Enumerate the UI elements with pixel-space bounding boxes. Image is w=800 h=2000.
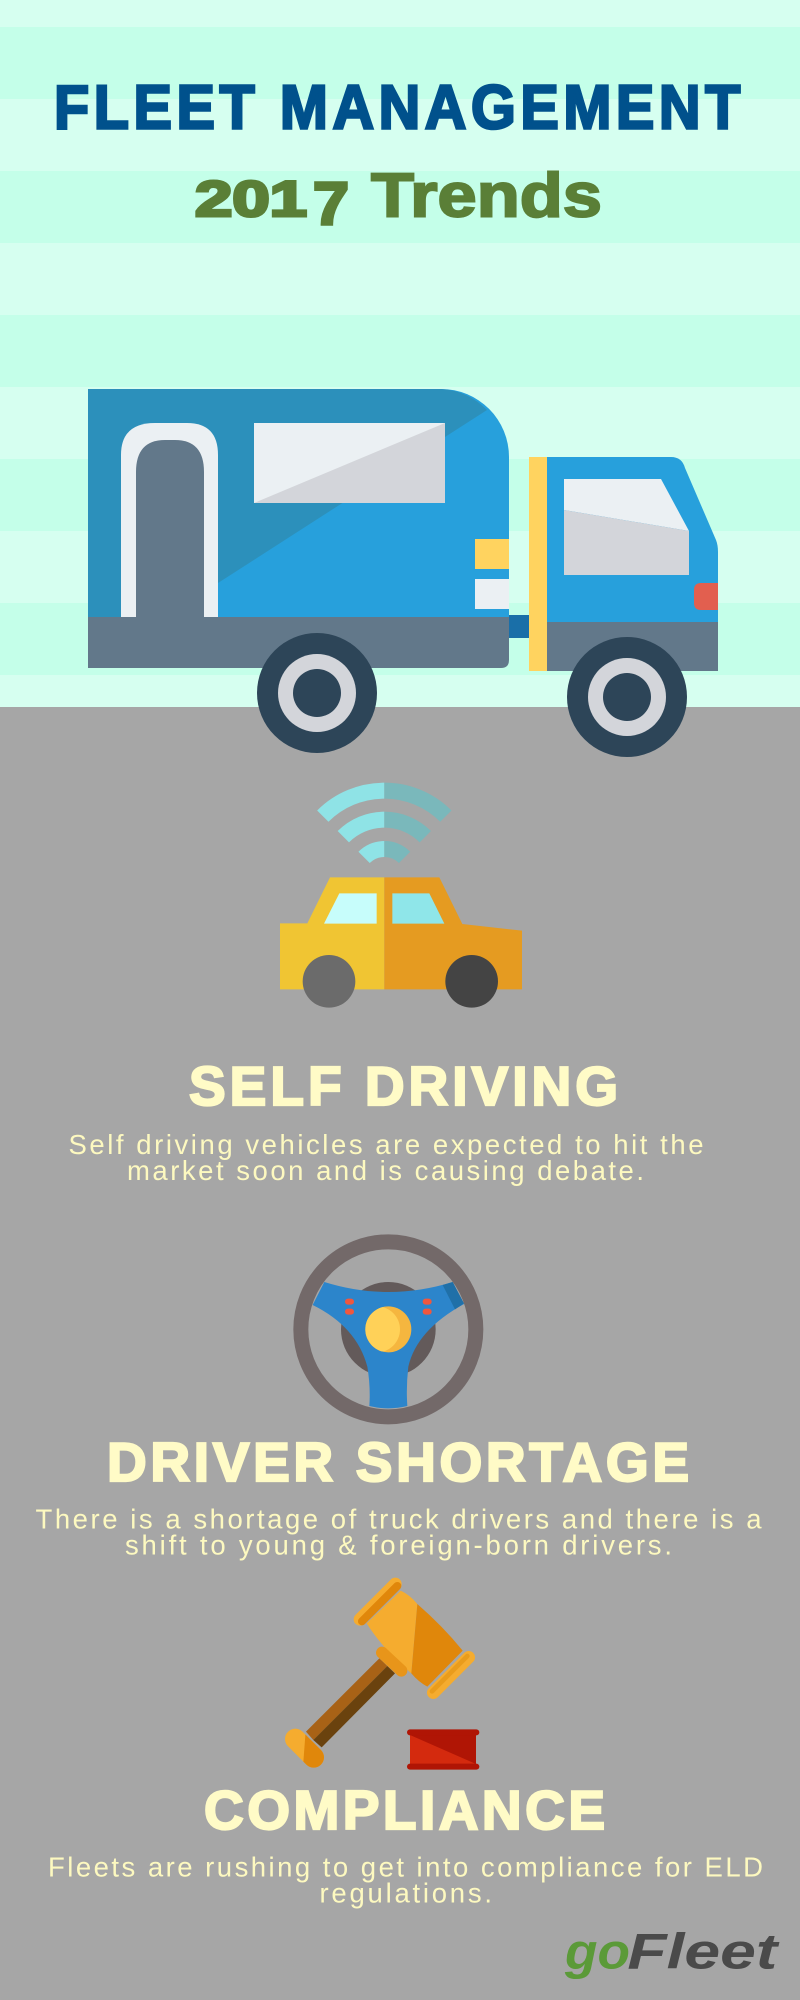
wifi signal <box>323 791 446 857</box>
car wheels <box>303 955 355 1008</box>
icon: delivery truck <box>88 389 718 757</box>
subtitle: Trends <box>371 162 602 230</box>
logo: goFleet: Fleet <box>627 1923 780 1979</box>
heading: driver shortage: DRIVER SHORTAGE <box>107 1431 689 1493</box>
text: driver shortage description <box>36 1504 762 1560</box>
car windows <box>324 893 377 924</box>
subtitle: 201 <box>195 171 307 227</box>
truck cargo body <box>88 389 509 617</box>
text: self driving description: Self driving vehicles are expected to hit the <box>68 1129 704 1160</box>
gavel pommel <box>295 1739 314 1757</box>
cab window <box>564 479 689 575</box>
heading: self driving: SELF DRIVING <box>189 1055 618 1117</box>
cab lower panel <box>547 622 718 671</box>
cargo body shaded area <box>88 389 487 617</box>
gavel handle <box>306 1658 387 1740</box>
title: FLEET MANAGEMENT <box>54 73 740 142</box>
headlight <box>694 583 718 610</box>
tail lights <box>475 539 509 609</box>
gavel head <box>367 1591 417 1673</box>
logo: goFleet: go <box>564 1923 630 1979</box>
car body <box>280 877 384 989</box>
icon: steering wheel <box>301 1242 476 1417</box>
heading: compliance: COMPLIANCE <box>204 1779 605 1841</box>
text: driver shortage description: shift to young & foreign-born drivers. <box>125 1530 672 1560</box>
rear wheel <box>257 633 377 753</box>
text: compliance description: Fleets are rushing to get into compliance for ELD <box>48 1852 763 1882</box>
cargo window <box>254 423 445 503</box>
connector <box>509 615 529 638</box>
icon: gavel <box>295 1584 479 1770</box>
yellow pillar <box>529 457 547 671</box>
gavel rings <box>360 1584 395 1619</box>
text: self driving description: market soon and is causing debate. <box>127 1155 644 1186</box>
icon: self driving car with wifi <box>280 791 522 1008</box>
front wheel <box>567 637 687 757</box>
cab <box>547 457 718 622</box>
text: compliance description <box>48 1852 763 1908</box>
text: driver shortage description: There is a shortage of truck drivers and there is a <box>36 1504 762 1534</box>
sound block <box>410 1735 476 1764</box>
text: compliance description: regulations. <box>320 1878 492 1908</box>
logo: goFleet <box>564 1923 780 1979</box>
text: self driving description <box>68 1129 704 1186</box>
subtitle: 7 <box>313 170 349 237</box>
cargo door <box>121 423 218 617</box>
chassis <box>88 617 509 668</box>
